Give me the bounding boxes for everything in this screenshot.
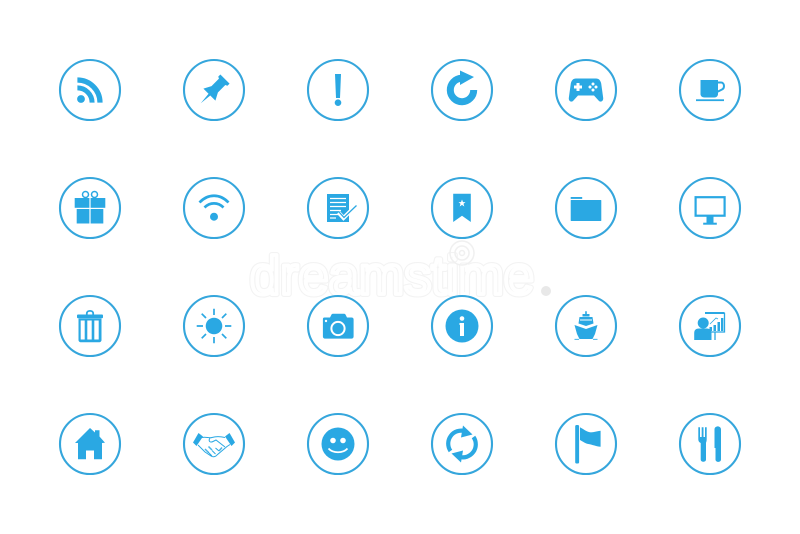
icon: handshake <box>184 414 244 474</box>
icon: smiley face <box>308 414 368 474</box>
icon: game controller <box>556 60 616 120</box>
icon: gift box <box>60 178 120 238</box>
icon: fork and knife <box>680 414 740 474</box>
icon: redo arrow <box>432 60 492 120</box>
icon: wifi <box>184 178 244 238</box>
icon: rss <box>60 60 120 120</box>
icon: bookmark with star <box>432 178 492 238</box>
watermark: dreamstime <box>250 246 534 306</box>
icon: ship <box>556 296 616 356</box>
icon: presenter with chart board <box>680 296 740 356</box>
icon: desktop monitor <box>680 178 740 238</box>
icon: document with check mark <box>308 178 368 238</box>
icon: information <box>432 296 492 356</box>
icon: push pin <box>184 60 244 120</box>
icon: sun <box>184 296 244 356</box>
icon: sync arrows <box>432 414 492 474</box>
icon: trash can <box>60 296 120 356</box>
icon: camera <box>308 296 368 356</box>
icon: folder <box>556 178 616 238</box>
icon: exclamation mark <box>308 60 368 120</box>
icon: home <box>60 414 120 474</box>
icon: coffee cup <box>680 60 740 120</box>
watermark: dreamstime <box>250 246 534 306</box>
icon: flag <box>556 414 616 474</box>
